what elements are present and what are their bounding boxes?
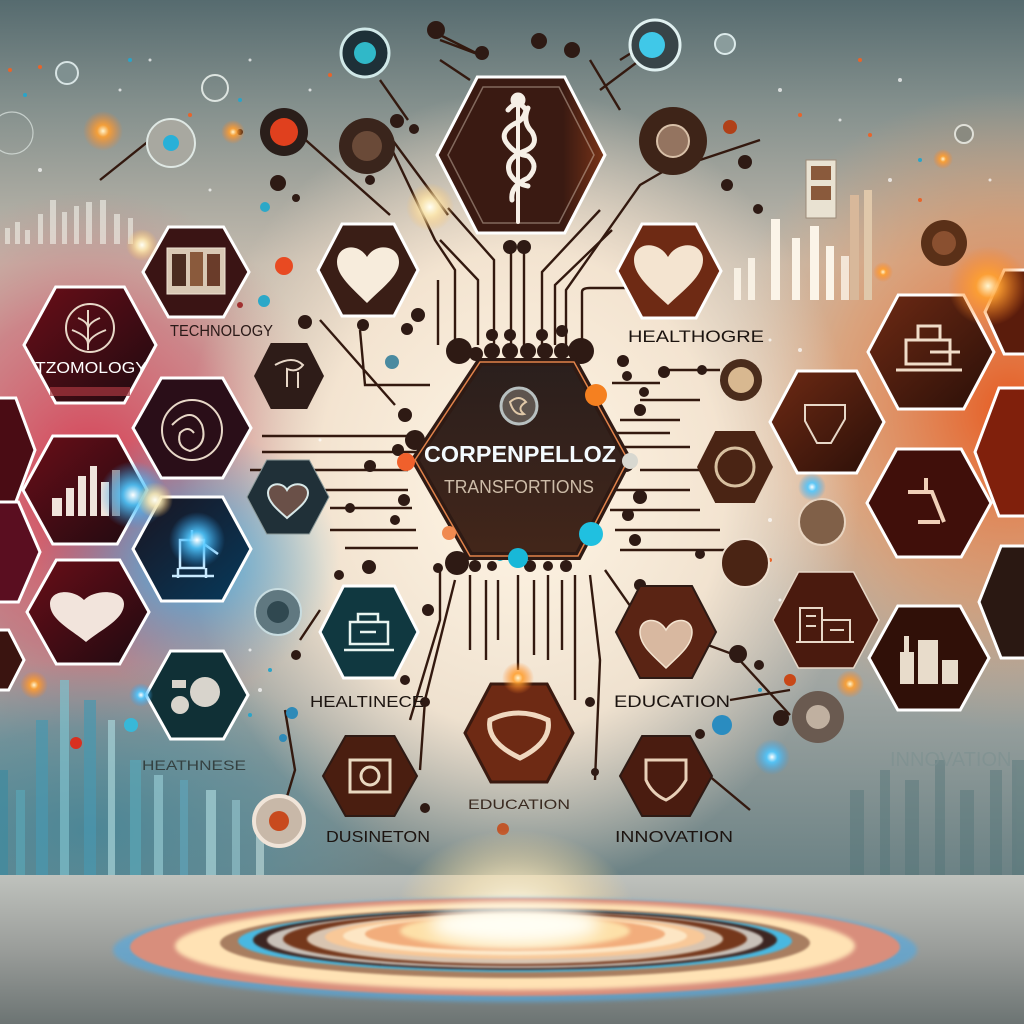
icon: machine — [344, 614, 394, 650]
coloured nodes — [70, 120, 796, 835]
hexagon: gears — [146, 651, 248, 739]
hexagon: right scene — [770, 371, 884, 473]
icon: building — [796, 608, 854, 642]
icon: heart — [337, 247, 399, 303]
icon: documents — [167, 248, 225, 294]
hexagon: heart lower centre — [616, 586, 716, 678]
hexagon: heart left — [318, 224, 418, 316]
faint word: INNOVATION — [890, 749, 1011, 771]
hexagon: edge right 2 — [975, 388, 1024, 516]
icon: heart — [50, 592, 124, 642]
central hexagon — [397, 362, 638, 575]
center emblem — [501, 388, 537, 424]
hexagon: edge right 3 — [979, 546, 1024, 658]
hexagon: right top — [868, 295, 994, 409]
center title: CORPENPELLOZ — [424, 441, 616, 467]
glowing lights — [20, 111, 1024, 775]
label: technology: TECHNOLOGY — [170, 323, 273, 340]
circuit traces — [100, 30, 790, 820]
icon: bars — [52, 466, 120, 516]
label: education: EDUCATION — [614, 692, 730, 711]
hexagon: machine — [320, 586, 418, 678]
label: healthcare: HEALTHOGRE — [628, 327, 764, 346]
icon: heart — [640, 620, 692, 668]
icon: shield — [646, 760, 686, 800]
trace endpoints — [216, 21, 789, 813]
hexagon: heart lower left — [27, 560, 149, 664]
right bar chart — [734, 190, 872, 300]
icon: figure — [172, 530, 218, 578]
label: education small: EDUCATION — [468, 796, 570, 812]
hexagon: small swirl — [254, 343, 324, 409]
icon: robot arm — [908, 478, 944, 522]
icon: gears — [171, 677, 220, 714]
label: TZOMOLOGY — [35, 360, 147, 377]
label: healthinece: HEALTINECE — [310, 694, 424, 711]
icon: spiral — [162, 400, 222, 460]
hexagon: documents — [143, 227, 249, 317]
icon: tools — [805, 405, 845, 443]
top circular badges — [56, 20, 973, 846]
label: dusineton: DUSINETON — [326, 829, 430, 846]
hexagon: right middle — [867, 449, 991, 557]
icon: heart — [268, 484, 308, 518]
hexagon: edge left 3 — [0, 630, 24, 690]
hexagon: edge left 1 — [0, 398, 35, 502]
light beam — [395, 830, 635, 1000]
hexagon: blue figure — [133, 497, 251, 601]
small document icon — [806, 160, 836, 218]
icon: heart — [634, 245, 703, 305]
hexagon: edge left 2 — [0, 502, 40, 602]
icon: device — [896, 326, 962, 370]
label: heathnese: HEATHNESE — [142, 757, 246, 773]
icon: swirl — [275, 360, 303, 388]
hexagon: spiral — [133, 378, 251, 478]
glowing rings — [113, 898, 917, 1002]
hexagon: small heart — [247, 460, 329, 534]
hexagon: bottom centre — [465, 684, 573, 782]
floor — [0, 875, 1024, 1024]
hexagon: right building — [773, 572, 879, 668]
lower right faded bars — [850, 760, 1024, 875]
hexagon: technology brain — [24, 287, 156, 403]
hexagon: right ring — [697, 431, 773, 503]
hexagon: heart right — [617, 224, 721, 318]
lower left teal bars — [0, 680, 264, 875]
hexagon: edge right 1 — [985, 270, 1024, 354]
icon: caduceus — [504, 95, 534, 222]
icon: factory — [900, 636, 958, 684]
left bar chart backdrop — [5, 200, 133, 244]
hexagon: caduceus — [437, 77, 605, 233]
icon: brain — [66, 304, 114, 352]
hexagon: right bottom — [869, 606, 989, 710]
icon: emblem — [490, 713, 548, 758]
hexagon: bottom right — [620, 736, 712, 816]
sparkle particles — [0, 25, 992, 722]
hexagon: camera — [323, 736, 417, 816]
icon: camera — [350, 760, 390, 792]
hexagon: bar chart — [23, 436, 147, 544]
label: innovation: INNOVATION — [615, 829, 733, 846]
center subtitle: TRANSFORTIONS — [444, 477, 594, 497]
